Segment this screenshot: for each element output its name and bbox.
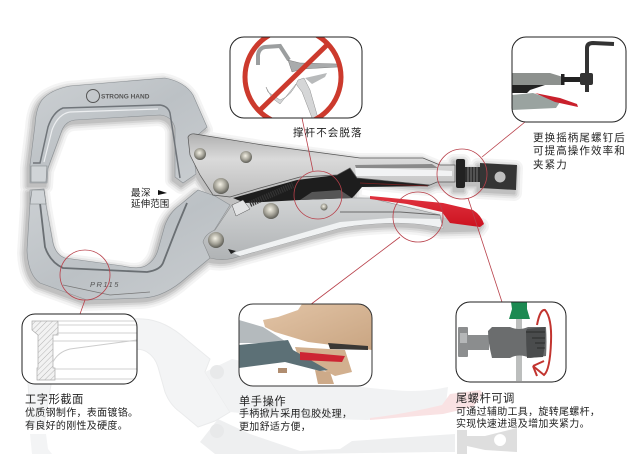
caption: crank bolt: 可提高操作效率和	[533, 144, 626, 157]
caption: lever: 撑杆不会脱落	[293, 126, 363, 139]
tail bolt	[456, 159, 517, 190]
panel: I-section drawing	[22, 314, 137, 384]
lower jaw	[27, 189, 230, 300]
caption: one-hand operation: 单手操作	[239, 394, 286, 408]
caption: tail screw: 尾螺杆可调	[456, 391, 515, 405]
rivets	[194, 148, 328, 248]
black lever	[233, 168, 430, 203]
caption: tail screw: 实现快速进退及增加夹紧力。	[456, 417, 590, 430]
jaw brand mark	[86, 90, 150, 102]
caption: I-section	[25, 392, 138, 432]
spring	[250, 185, 293, 204]
jaw brand mark: STRONG HAND	[101, 94, 150, 100]
callout lines	[60, 118, 525, 314]
prohibition sign	[242, 38, 344, 118]
panel: crank bolt	[512, 37, 626, 122]
caption: crank bolt: 更换摇柄尾螺钉后	[533, 131, 626, 144]
locking C-clamp pliers	[27, 78, 517, 300]
caption: tail screw	[456, 391, 600, 430]
caption: crank bolt	[533, 131, 626, 171]
depth label	[131, 188, 169, 210]
drop shadow	[25, 81, 515, 303]
caption: I-section: 有良好的刚性及硬度。	[25, 419, 128, 432]
reflection of clamp	[27, 317, 517, 454]
caption: one-hand operation: 更加舒适方便，	[239, 420, 311, 433]
depth label: 最深	[131, 188, 151, 199]
caption: I-section: 优质钢制作，表面镀铬。	[25, 406, 138, 419]
panel: lever does not fall off	[230, 36, 362, 118]
lower handle	[203, 198, 443, 260]
caption: one-hand operation: 手柄掀片采用包胶处理，	[239, 407, 352, 420]
upper handle	[188, 134, 455, 197]
panel: one-hand operation photo	[239, 304, 372, 386]
link	[232, 200, 250, 216]
caption: one-hand operation	[239, 394, 352, 433]
depth label: 延伸范围	[131, 198, 169, 210]
panel: tail screw adjustment	[456, 302, 566, 382]
icon: rotation arrow	[533, 310, 551, 376]
red grip	[370, 196, 484, 227]
caption: I-section: 工字形截面	[25, 392, 84, 406]
caption: crank bolt: 夹紧力	[533, 158, 568, 171]
upper jaw	[30, 78, 207, 183]
caption: tail screw: 可通过辅助工具，旋转尾螺杆，	[456, 405, 600, 418]
jaw model text: PR115	[90, 280, 120, 289]
